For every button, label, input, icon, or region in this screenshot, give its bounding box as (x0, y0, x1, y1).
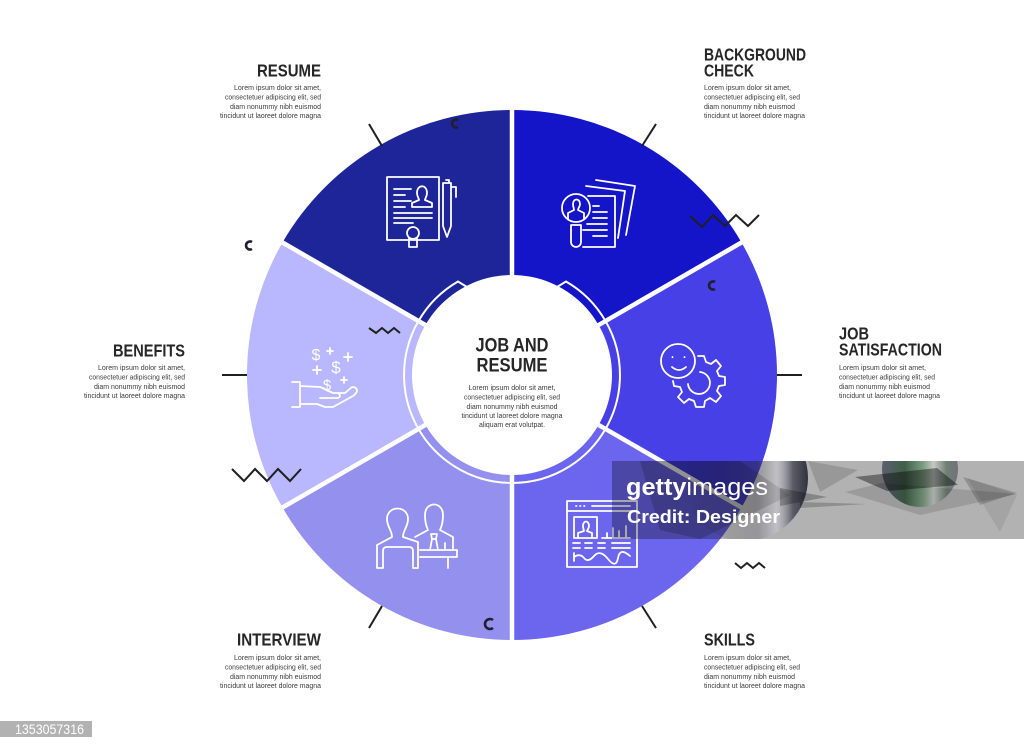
centre title: Lorem ipsum dolor sit amet, (468, 385, 556, 392)
label: job satisfaction: diam nonummy nibh euismod (839, 384, 930, 391)
icon: money in hand: $ (323, 377, 332, 394)
icon: smile and gear (661, 344, 725, 407)
icon: money in hand: $ (312, 347, 321, 364)
label: background check: tincidunt ut laoreet dolore magna (704, 113, 805, 120)
centre title: aliquam erat volutpat. (479, 422, 545, 429)
segment: benefits (247, 242, 512, 508)
label: job satisfaction (839, 324, 942, 400)
centre title: diam nonummy nibh euismod (466, 404, 558, 411)
label: background check: CHECK (704, 60, 754, 80)
centre title: consectetuer adipiscing elit, sed (464, 394, 560, 402)
label: background check: diam nonummy nibh euismod (704, 104, 795, 111)
label: resume: tincidunt ut laoreet dolore magna (220, 113, 321, 120)
label: skills: tincidunt ut laoreet dolore magna (704, 683, 805, 690)
label: background check: BACKGROUND (704, 44, 806, 64)
centre title (462, 336, 563, 429)
label: interview: INTERVIEW (237, 630, 321, 650)
label: benefits: diam nonummy nibh euismod (94, 384, 185, 391)
icon: money in hand (292, 347, 357, 407)
tick marks (222, 124, 802, 628)
icon: web profile window (567, 501, 637, 567)
icon: background check (562, 180, 635, 247)
centre title: tincidunt ut laoreet dolore magna (462, 413, 563, 420)
label: benefits (84, 340, 185, 400)
label: benefits: Lorem ipsum dolor sit amet, (98, 365, 185, 372)
label: benefits: BENEFITS (113, 340, 185, 360)
segment separators (279, 105, 745, 645)
segment: resume (282, 110, 512, 375)
centre circle (412, 275, 612, 475)
label: interview: diam nonummy nibh euismod (230, 674, 321, 681)
label: interview: Lorem ipsum dolor sit amet, (234, 655, 321, 662)
label: job satisfaction: consectetuer adipiscing elit, sed (839, 374, 935, 382)
segment: job satisfaction (512, 242, 777, 508)
label: interview (220, 630, 321, 690)
label: interview: tincidunt ut laoreet dolore magna (220, 683, 321, 690)
label: resume: RESUME (257, 60, 321, 80)
label: job satisfaction: SATISFACTION (839, 340, 942, 360)
label: job satisfaction: Lorem ipsum dolor sit amet, (839, 365, 926, 372)
centre title: JOB AND (476, 336, 548, 356)
icon: interview (377, 504, 457, 568)
icon: resume (387, 177, 456, 247)
label: skills: Lorem ipsum dolor sit amet, (704, 655, 791, 662)
label: job satisfaction: JOB (839, 324, 869, 344)
label: skills: diam nonummy nibh euismod (704, 674, 795, 681)
segment: skills (512, 375, 742, 640)
label: interview: consectetuer adipiscing elit, sed (225, 664, 321, 672)
label: resume: consectetuer adipiscing elit, sed (225, 94, 321, 102)
centre title: RESUME (476, 356, 548, 376)
label: skills: consectetuer adipiscing elit, sed (704, 664, 800, 672)
watermark band (612, 461, 1024, 539)
label: background check: consectetuer adipiscing elit, sed (704, 94, 800, 102)
segment: interview (282, 375, 512, 640)
label: skills (704, 630, 805, 690)
segment: background check (512, 110, 742, 375)
icon: money in hand: $ (331, 358, 341, 377)
donut chart (247, 110, 777, 640)
label: benefits: consectetuer adipiscing elit, sed (89, 374, 185, 382)
label: resume: diam nonummy nibh euismod (230, 104, 321, 111)
watermark band: Credit: Designer (627, 507, 780, 527)
label: resume (220, 60, 321, 120)
label: background check (704, 44, 806, 120)
label: skills: SKILLS (704, 630, 755, 650)
image id tag: 1353057316 (15, 721, 84, 737)
label: benefits: tincidunt ut laoreet dolore magna (84, 393, 185, 400)
watermark band: gettyimages (626, 474, 768, 501)
decorative squiggles and arcs (232, 120, 765, 629)
label: resume: Lorem ipsum dolor sit amet, (234, 85, 321, 92)
label: job satisfaction: tincidunt ut laoreet dolore magna (839, 393, 940, 400)
inner ring arcs (404, 282, 620, 483)
label: background check: Lorem ipsum dolor sit amet, (704, 85, 791, 92)
